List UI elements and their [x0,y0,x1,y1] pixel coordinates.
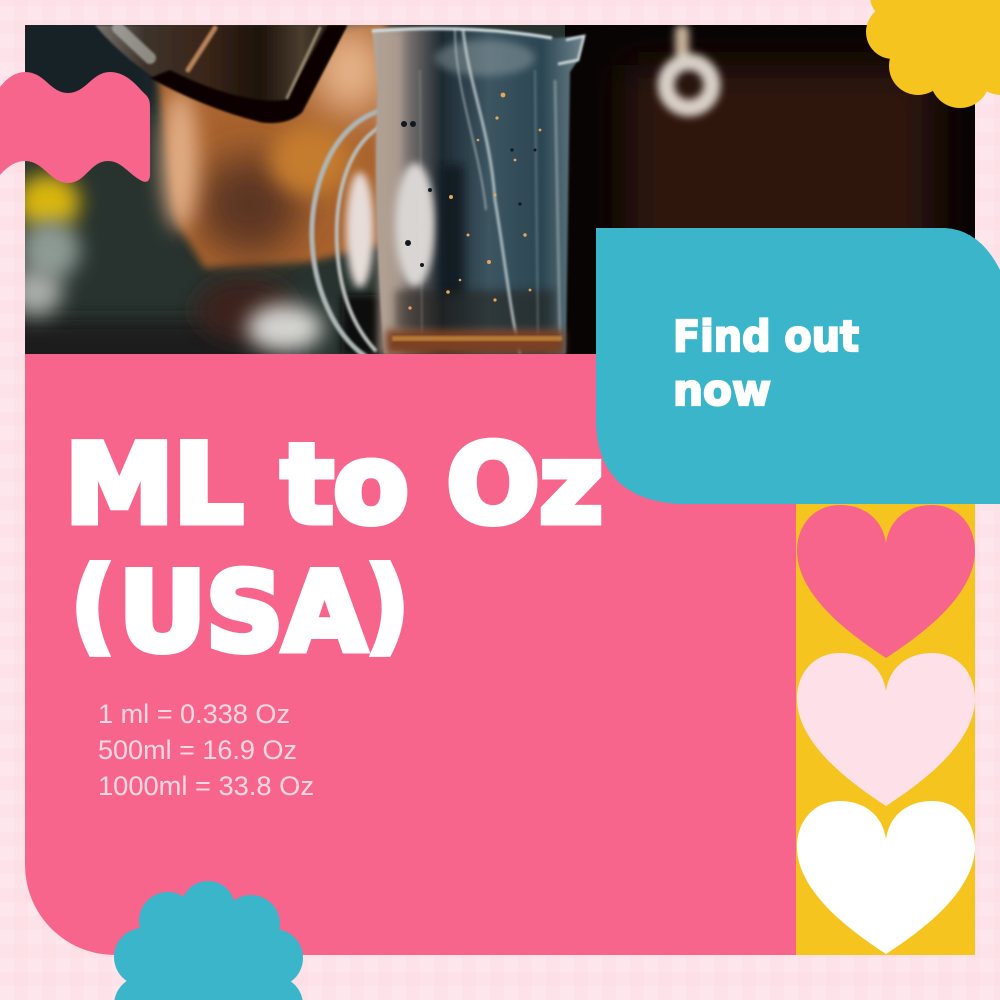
heart: white [797,801,975,954]
title: ML to Oz [65,421,603,548]
callout text [673,312,859,416]
glass beaker [372,27,584,354]
teal scalloped flower [114,881,303,1000]
pink main panel [25,354,800,955]
title: ( [74,550,110,662]
beaker sparkles [408,93,541,310]
decorative pink wave [0,72,150,183]
hanging ring [666,25,712,108]
conversion list: 1000ml = 33.8 Oz [98,771,314,801]
callout text: Find out [673,312,859,362]
conversion list: 500ml = 16.9 Oz [98,735,297,765]
conversion list: 1 ml = 0.338 Oz [98,699,290,729]
callout text: now [673,366,771,416]
teal callout panel [596,228,1000,504]
conversion list [98,699,314,801]
title: ) [370,550,406,662]
heart: light pink [797,653,975,806]
sediment [386,330,564,354]
photo: pouring water into a glass beaker [25,25,975,354]
title [65,421,603,676]
kettle [95,25,347,123]
yellow scalloped flower [866,0,1000,108]
yellow heart column [796,504,975,955]
title: USA [119,549,366,676]
heart: pink [797,505,975,658]
glass handle [312,110,382,356]
